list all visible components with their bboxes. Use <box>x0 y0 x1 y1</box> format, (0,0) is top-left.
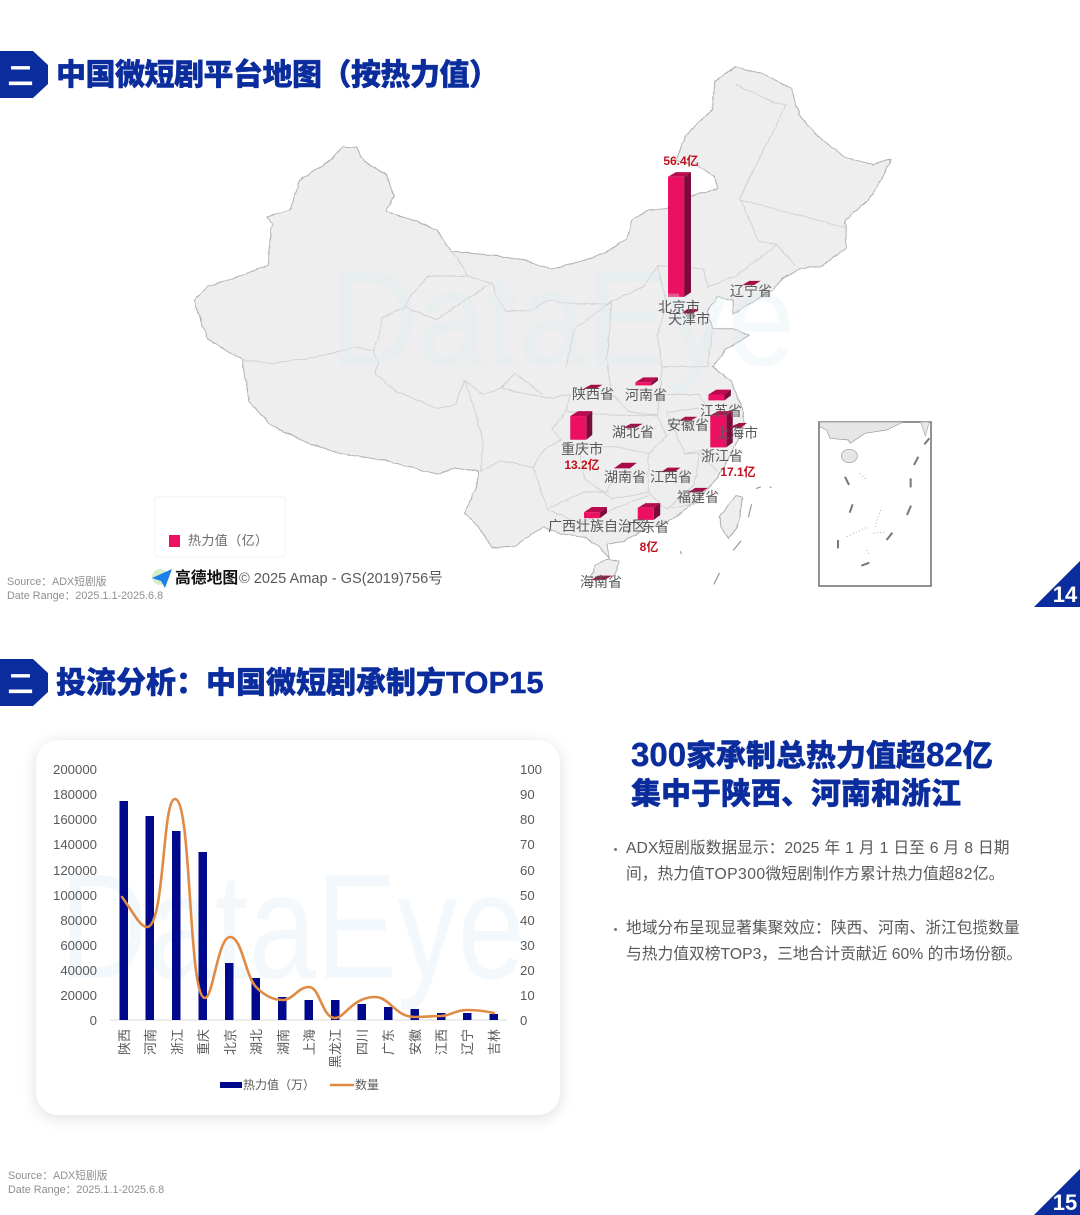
title: map section: 中国微短剧平台地图（按热力值） <box>56 59 498 92</box>
right axis: 30 <box>520 938 535 953</box>
page number 14: 14 <box>1053 582 1078 607</box>
badge: section marker 1 <box>0 51 48 98</box>
x axis labels: 安徽 <box>408 1029 423 1055</box>
attribution: Amap: © 2025 Amap - GS(2019)756号 <box>239 571 443 587</box>
left axis: 60000 <box>60 938 97 953</box>
x axis labels: 湖北 <box>249 1029 264 1055</box>
text block: bullet 2 <box>614 919 1022 963</box>
left axis: 80000 <box>60 913 97 928</box>
x axis labels: 吉林 <box>487 1029 502 1055</box>
right axis: 10 <box>520 988 535 1003</box>
attribution: Amap <box>152 568 443 588</box>
title: placement analysis: 投流分析：中国微短剧承制方TOP15 <box>56 665 544 700</box>
x axis labels: 浙江 <box>170 1029 185 1055</box>
x axis labels: 辽宁 <box>460 1029 475 1055</box>
x axis labels: 四川 <box>355 1029 370 1055</box>
labels: province names: 北京市 <box>658 299 700 315</box>
source note: analysis page: Source：ADX短剧版 <box>8 1170 108 1182</box>
labels: province names: 江苏省 <box>700 403 742 419</box>
labels: province names: 湖北省 <box>612 424 654 440</box>
x axis labels: 河南 <box>143 1029 158 1055</box>
labels: province names: 湖南省 <box>604 469 646 485</box>
chart legend: 数量 <box>355 1077 379 1092</box>
data blocks: provincial heat bars <box>570 172 761 580</box>
chart: heat value bars and count line <box>53 762 542 1092</box>
left axis: 20000 <box>60 988 97 1003</box>
x axis labels: 陕西 <box>117 1029 132 1055</box>
labels: province names <box>548 283 772 590</box>
x axis labels: 黑龙江 <box>328 1029 343 1068</box>
labels: province names: 福建省 <box>677 489 719 505</box>
labels: province names: 浙江省 <box>701 448 743 464</box>
labels: heat values: 56.4亿 <box>663 153 699 168</box>
right axis: 80 <box>520 812 535 827</box>
left axis: 0 <box>90 1013 97 1028</box>
source note: map page: Date Range：2025.1.1-2025.6.8 <box>7 590 163 602</box>
labels: province names: 广东省 <box>627 519 669 535</box>
left axis: 120000 <box>53 863 97 878</box>
chart legend <box>220 1077 379 1092</box>
line: count <box>122 799 494 1018</box>
left axis: 180000 <box>53 787 97 802</box>
left axis: 100000 <box>53 888 97 903</box>
left axis: 140000 <box>53 837 97 852</box>
source note: analysis page <box>8 1170 164 1196</box>
x axis labels: 上海 <box>302 1029 317 1055</box>
page number 15: 15 <box>1053 1190 1077 1215</box>
right axis: 50 <box>520 888 535 903</box>
text block: bullet 1: ADX短剧版数据显示：2025 年 1 月 1 日至 6 月 8 日期 <box>626 840 1010 857</box>
labels: province names: 天津市 <box>668 311 710 327</box>
panel: chart card <box>36 740 560 1115</box>
right axis <box>520 762 542 1028</box>
right axis: 90 <box>520 787 535 802</box>
heading: key finding: 集中于陕西、河南和浙江 <box>631 778 961 811</box>
attribution: Amap: 高德地图 <box>175 568 238 587</box>
labels: province names: 重庆市 <box>561 441 603 457</box>
page number 14 <box>1034 561 1080 607</box>
left axis <box>53 762 97 1028</box>
source note: analysis page: Date Range：2025.1.1-2025.6.8 <box>8 1184 164 1196</box>
labels: province names: 安徽省 <box>667 417 709 433</box>
right axis: 0 <box>520 1013 527 1028</box>
legend: heat value <box>155 497 285 557</box>
right axis: 60 <box>520 863 535 878</box>
labels: province names: 陕西省 <box>572 386 614 402</box>
inset: South China Sea <box>819 422 931 586</box>
labels: province names: 江西省 <box>650 469 692 485</box>
left axis: 160000 <box>53 812 97 827</box>
text block: bullet 1: 间，热力值TOP300微短剧制作方累计热力值超82亿。 <box>626 866 1004 883</box>
map: China outline and provinces <box>194 67 891 584</box>
page number 15 <box>1034 1169 1080 1215</box>
badge: section marker 2: 二 <box>7 669 34 699</box>
labels: province names: 辽宁省 <box>730 283 772 299</box>
labels: heat values: 17.1亿 <box>720 464 756 479</box>
right axis: 100 <box>520 762 542 777</box>
text block: bullet 1 <box>614 839 1010 883</box>
labels: province names: 海南省 <box>580 574 622 590</box>
labels: province names: 河南省 <box>625 387 667 403</box>
text block: bullet 2: 与热力值双榜TOP3，三地合计贡献近 60% 的市场份额。 <box>626 946 1022 963</box>
labels: heat values: 13.2亿 <box>564 457 600 472</box>
legend: heat value: 热力值（亿） <box>188 533 268 548</box>
labels: heat values: 8亿 <box>640 539 658 554</box>
labels: province names: 上海市 <box>716 425 758 441</box>
x axis labels: 北京 <box>223 1029 238 1055</box>
x axis labels <box>117 1029 502 1068</box>
labels: province names: 广西壮族自治区 <box>548 518 646 534</box>
x axis labels: 重庆 <box>196 1029 211 1055</box>
right axis: 20 <box>520 963 535 978</box>
x axis labels: 湖南 <box>276 1029 291 1055</box>
x axis labels: 江西 <box>434 1029 449 1055</box>
panel: China map <box>152 66 932 590</box>
badge: section marker 2 <box>0 659 48 706</box>
chart legend: 热力值（万） <box>243 1077 315 1092</box>
x axis labels: 广东 <box>381 1029 396 1055</box>
source note: map page <box>7 576 163 602</box>
badge: section marker 1: 二 <box>7 61 34 91</box>
right axis: 70 <box>520 837 535 852</box>
right axis: 40 <box>520 913 535 928</box>
bars: heat value <box>120 801 498 1020</box>
source note: map page: Source：ADX短剧版 <box>7 576 107 588</box>
heading: key finding: 300家承制总热力值超82亿 <box>631 736 993 773</box>
text block: bullet 2: 地域分布呈现显著集聚效应：陕西、河南、浙江包揽数量 <box>626 920 1020 937</box>
watermark: DataEye on map: DataEye <box>330 243 795 394</box>
left axis: 40000 <box>60 963 97 978</box>
heading: key finding <box>630 736 993 811</box>
left axis: 200000 <box>53 762 97 777</box>
labels: heat values <box>564 153 756 554</box>
